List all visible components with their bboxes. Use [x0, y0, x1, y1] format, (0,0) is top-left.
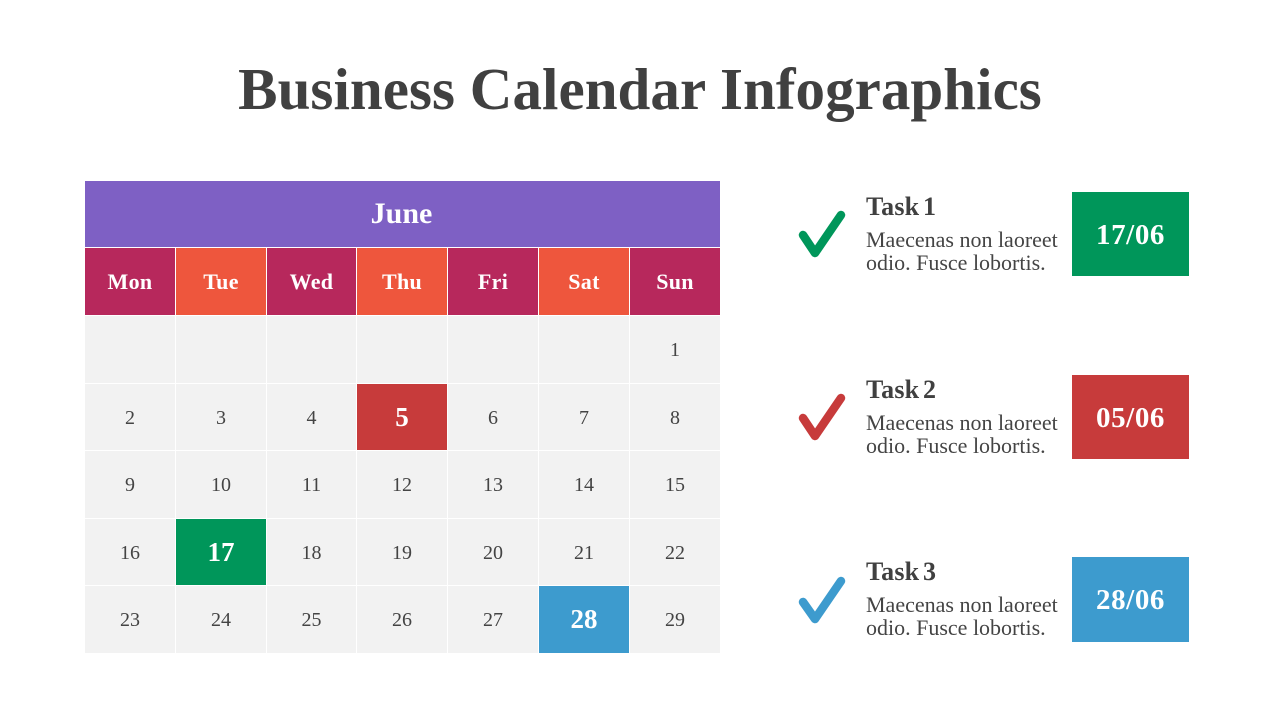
task 1 text [866, 227, 1058, 275]
date grid: 12 [392, 474, 412, 496]
date grid: 22 [665, 542, 685, 564]
weekday: Sat: Sat [568, 269, 600, 294]
task 2 text [866, 410, 1058, 458]
date grid: 18 [302, 542, 322, 564]
weekday: Thu: Thu [382, 269, 422, 294]
task 2 title: Task 2 [866, 375, 936, 404]
highlighted date: 28 [539, 586, 629, 653]
date grid: 7 [579, 407, 589, 429]
icon: blue check [798, 576, 846, 624]
date grid: 4 [306, 407, 316, 429]
task 1 text: Maecenas non laoreet [866, 227, 1058, 252]
date grid: 2 [125, 407, 135, 429]
weekday: Mon: Mon [108, 269, 152, 294]
task 2 text: Maecenas non laoreet [866, 410, 1058, 435]
weekday: Tue [176, 248, 266, 315]
date grid: 11 [302, 474, 321, 496]
highlighted date: 17: 17 [208, 537, 234, 567]
task 2 date: 05/06 [1096, 402, 1165, 434]
weekday: Mon [85, 248, 175, 315]
task 1 title: Task 1 [866, 192, 936, 221]
date grid: 9 [125, 474, 135, 496]
date grid: 15 [665, 474, 685, 496]
task 3 text [866, 592, 1058, 640]
task 3 date [1072, 557, 1189, 642]
date grid [85, 316, 720, 653]
date grid: 14 [574, 474, 594, 496]
task 2 date [1072, 375, 1189, 459]
highlighted date: 5 [357, 384, 447, 450]
task 2 text: odio. Fusce lobortis. [866, 433, 1046, 458]
highlighted date: 28: 28 [570, 604, 598, 634]
weekday: Sun [630, 248, 720, 315]
date grid: 29 [665, 609, 685, 631]
date grid: 23 [120, 609, 140, 631]
weekday: Wed [267, 248, 356, 315]
title: Business Calendar Infographics [238, 56, 1042, 122]
date grid: 20 [483, 542, 503, 564]
task 1 date [1072, 192, 1189, 276]
task 3 date: 28/06 [1096, 584, 1165, 616]
weekday: Sun: Sun [656, 269, 694, 294]
date grid: 25 [302, 609, 322, 631]
date grid: 19 [392, 542, 412, 564]
date grid: 3 [216, 407, 226, 429]
date grid: 6 [488, 407, 498, 429]
weekday: Sat [539, 248, 629, 315]
date grid: 1 [670, 339, 680, 361]
highlighted date: 5: 5 [395, 402, 409, 432]
date grid: 16 [120, 542, 140, 564]
task 1 text: odio. Fusce lobortis. [866, 250, 1046, 275]
icon: red check [798, 394, 846, 440]
task 1 date: 17/06 [1096, 219, 1165, 251]
task 3 text: Maecenas non laoreet [866, 592, 1058, 617]
date grid: 27 [483, 609, 503, 631]
weekday: Fri [448, 248, 538, 315]
month header [85, 181, 718, 247]
task 3 text: odio. Fusce lobortis. [866, 615, 1046, 640]
weekday: Fri: Fri [478, 269, 508, 294]
task 3 title: Task 3 [866, 557, 936, 586]
date grid: 10 [211, 474, 231, 496]
date grid: 24 [211, 609, 231, 631]
weekday: Wed: Wed [290, 269, 333, 294]
panel: calendar [85, 181, 720, 653]
weekday: Thu [357, 248, 447, 315]
highlighted date: 17 [176, 519, 266, 585]
date grid: 26 [392, 609, 412, 631]
date grid: 13 [483, 474, 503, 496]
weekday: Tue: Tue [203, 269, 239, 294]
date grid: 21 [574, 542, 594, 564]
date grid: 8 [670, 407, 680, 429]
icon: green check [798, 210, 846, 258]
month header: June [371, 197, 432, 230]
